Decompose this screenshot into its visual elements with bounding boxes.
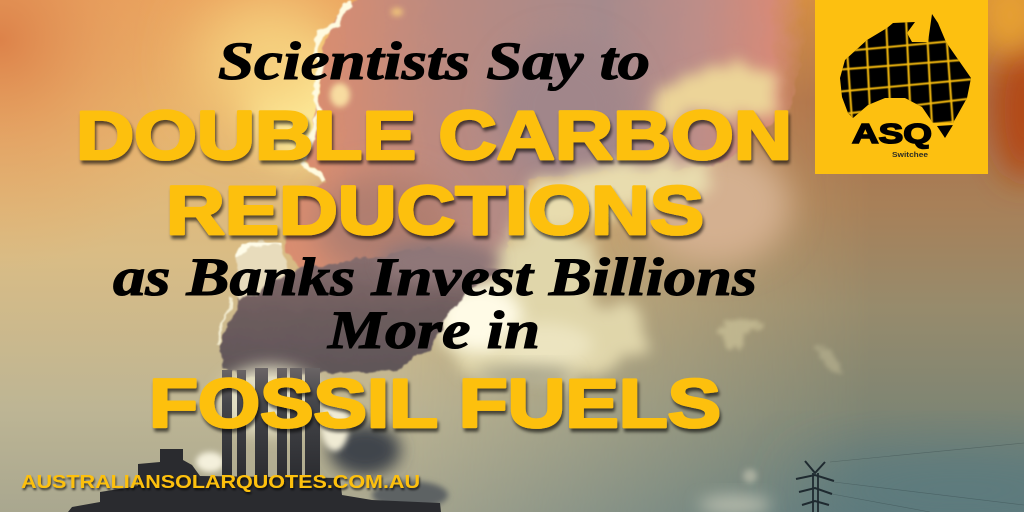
cream streak upper right <box>650 60 778 130</box>
website url: AUSTRALIANSOLARQUOTES.COM.AU <box>21 471 420 492</box>
dark smoke column <box>219 248 500 378</box>
heading line: More in: More in <box>327 300 540 360</box>
heading line: Scientists Say to: Scientists Say to <box>218 31 650 91</box>
icon: Australia map of solar panels <box>840 14 971 138</box>
sun glow <box>250 50 350 160</box>
lit cloud puff left of plume <box>232 243 290 300</box>
transmission tower <box>796 443 1024 512</box>
power plant silhouette <box>68 368 441 512</box>
logo: ASQ <box>815 0 988 174</box>
heading line: DOUBLE CARBON: DOUBLE CARBON <box>76 97 792 174</box>
small cloud wisps <box>715 318 765 352</box>
upper mauve cloud <box>284 0 820 290</box>
factory steam and dark exhaust <box>196 366 448 509</box>
bright lower cloud <box>440 225 650 382</box>
heading line: as Banks Invest Billions: as Banks Invest Billions <box>113 247 757 307</box>
cream band over CARBON <box>510 160 720 240</box>
tan haze right of plume <box>640 145 790 265</box>
smoke plume <box>217 0 842 512</box>
logo sub-brand: Switchee <box>892 152 928 159</box>
mauve pocket <box>497 40 633 180</box>
heading line: REDUCTIONS: REDUCTIONS <box>166 172 704 249</box>
logo wordmark: ASQ <box>852 118 932 149</box>
cloud rim light <box>302 3 352 180</box>
heading line: FOSSIL FUELS: FOSSIL FUELS <box>149 365 721 442</box>
